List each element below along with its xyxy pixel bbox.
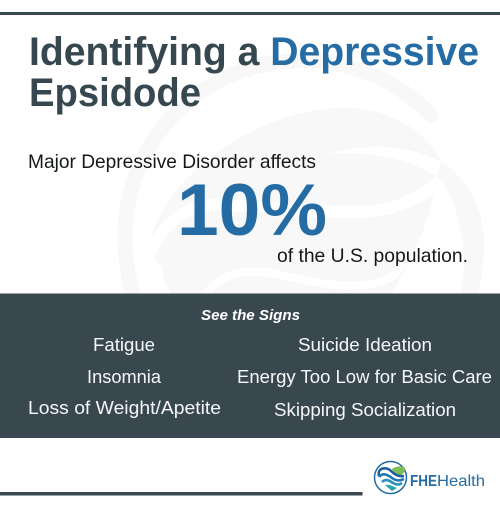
sign: insomnia: Insomnia: [87, 366, 162, 387]
title: [29, 30, 479, 115]
logo wordmark: Health: Health: [437, 473, 485, 490]
icon: logo emblem: [374, 462, 406, 494]
big number 10%: 10%: [177, 170, 327, 251]
title line 1: Identifying a Depressive: [29, 30, 479, 74]
title line 2: Epsidode: [29, 71, 201, 115]
panel: see the signs: [0, 294, 500, 438]
top rule: [0, 12, 500, 15]
statistic block: [28, 151, 468, 267]
sign: energy too low: Energy Too Low for Basic Care: [237, 366, 492, 387]
panel heading: See the Signs: [201, 308, 300, 324]
sign: suicide ideation: Suicide Ideation: [298, 334, 432, 355]
sign: skipping socialization: Skipping Socialization: [274, 399, 456, 420]
stat lead-in text: Major Depressive Disorder affects: [28, 151, 316, 173]
logo: FHE Health: [374, 462, 485, 494]
watermark: logo emblem: [125, 61, 484, 297]
stat closing text: of the U.S. population.: [277, 245, 468, 267]
sign: fatigue: Fatigue: [93, 334, 155, 355]
sign: loss of weight: Loss of Weight/Apetite: [28, 397, 221, 418]
bottom rule: [0, 492, 362, 496]
signs list: [28, 334, 492, 420]
logo wordmark: FHE: FHE: [410, 473, 437, 490]
